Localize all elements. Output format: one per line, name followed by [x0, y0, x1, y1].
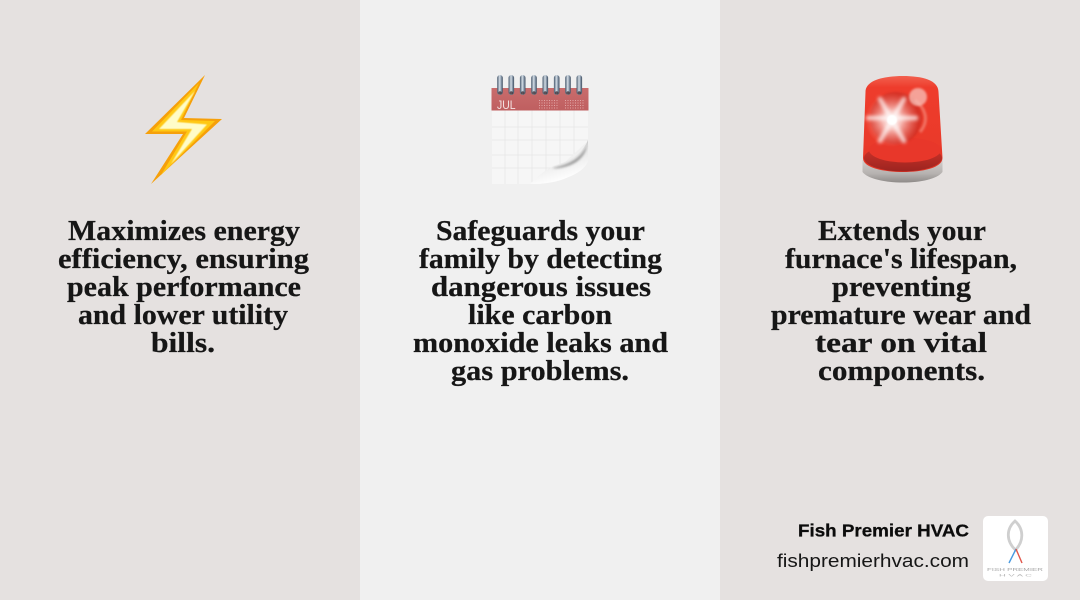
- heading: furnace lifespan text: components.: [818, 355, 985, 387]
- calendar page curl: [530, 140, 589, 185]
- footer: company name: Fish Premier HVAC: [798, 520, 969, 540]
- heading: energy efficiency text: efficiency, ensuring: [58, 243, 310, 275]
- icon: calendar: [492, 75, 589, 185]
- heading: energy efficiency text: bills.: [151, 327, 215, 359]
- icon: lightning bolt: [145, 75, 222, 184]
- heading: family safety text: family by detecting: [419, 243, 663, 275]
- heading: family safety text: [413, 215, 668, 387]
- siren flash: [865, 93, 919, 147]
- logo wordmark: FISH PREMIER: [987, 567, 1044, 572]
- heading: energy efficiency text: [58, 215, 310, 359]
- heading: furnace lifespan text: tear on vital: [815, 327, 987, 359]
- heading: family safety text: gas problems.: [451, 355, 629, 387]
- heading: energy efficiency text: Maximizes energy: [68, 215, 301, 247]
- heading: furnace lifespan text: preventing: [832, 271, 972, 303]
- panel: family safety: [360, 0, 720, 600]
- heading: furnace lifespan text: premature wear and: [771, 299, 1031, 331]
- logo: [983, 516, 1048, 581]
- panel: energy efficiency: [0, 0, 360, 600]
- calendar month label: JUL: [497, 100, 516, 112]
- heading: furnace lifespan text: [771, 215, 1031, 387]
- heading: furnace lifespan text: Extends your: [818, 215, 986, 247]
- heading: family safety text: Safeguards your: [436, 215, 645, 247]
- heading: family safety text: dangerous issues: [431, 271, 651, 303]
- heading: energy efficiency text: and lower utility: [78, 299, 289, 331]
- heading: energy efficiency text: peak performance: [67, 271, 301, 303]
- footer: website: fishpremierhvac.com: [777, 551, 969, 571]
- icon: red siren light: [862, 76, 942, 182]
- logo sub-wordmark: H V A C: [999, 574, 1033, 578]
- heading: family safety text: like carbon: [468, 299, 612, 331]
- heading: furnace lifespan text: furnace's lifespan,: [785, 243, 1017, 275]
- panel: furnace lifespan: [720, 0, 1080, 600]
- heading: family safety text: monoxide leaks and: [413, 327, 668, 359]
